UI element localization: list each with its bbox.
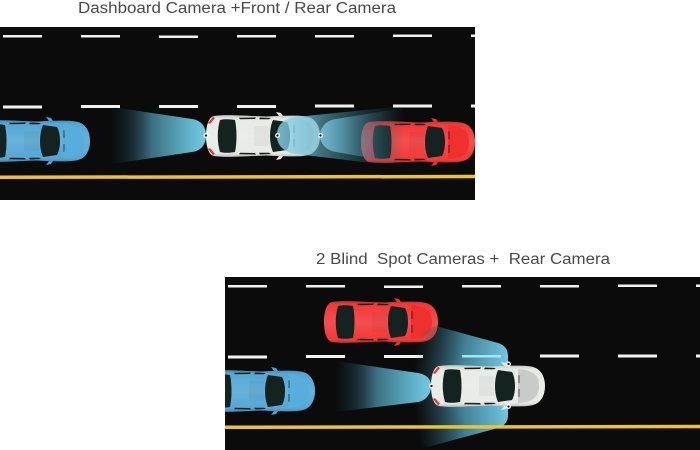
panel: blind spot camera road scene <box>201 251 700 450</box>
car: white camera car <box>206 112 320 160</box>
lane markings <box>228 284 700 358</box>
panel: dashboard camera road scene <box>0 0 475 200</box>
camera markers <box>430 362 510 408</box>
yellow road edge line <box>225 425 700 429</box>
car: red car in blind spot <box>324 298 438 346</box>
camera markers <box>204 134 322 137</box>
camera cone: front view over hood <box>277 106 404 165</box>
title: front and rear camera: Dashboard Camera +Front / Rear Camera <box>78 0 396 17</box>
yellow road edge line <box>0 175 475 179</box>
camera cone: second front beam <box>320 108 404 164</box>
car: blue following car <box>225 367 315 415</box>
camera cone: right blind spot <box>414 386 508 448</box>
car: white camera car <box>431 362 545 410</box>
camera cone: left blind spot <box>414 326 508 385</box>
road surface <box>225 277 700 450</box>
title: blind spot and rear camera: 2 Blind Spot Cameras + Rear Camera <box>316 251 610 268</box>
lane markings <box>3 34 475 108</box>
lane dash seen through blind spot cone <box>462 355 501 358</box>
camera cone: rear view <box>112 107 206 164</box>
car: red car ahead <box>361 118 475 166</box>
car: blue following car <box>0 117 90 165</box>
camera cone: rear view <box>336 361 431 412</box>
road surface <box>0 27 475 200</box>
